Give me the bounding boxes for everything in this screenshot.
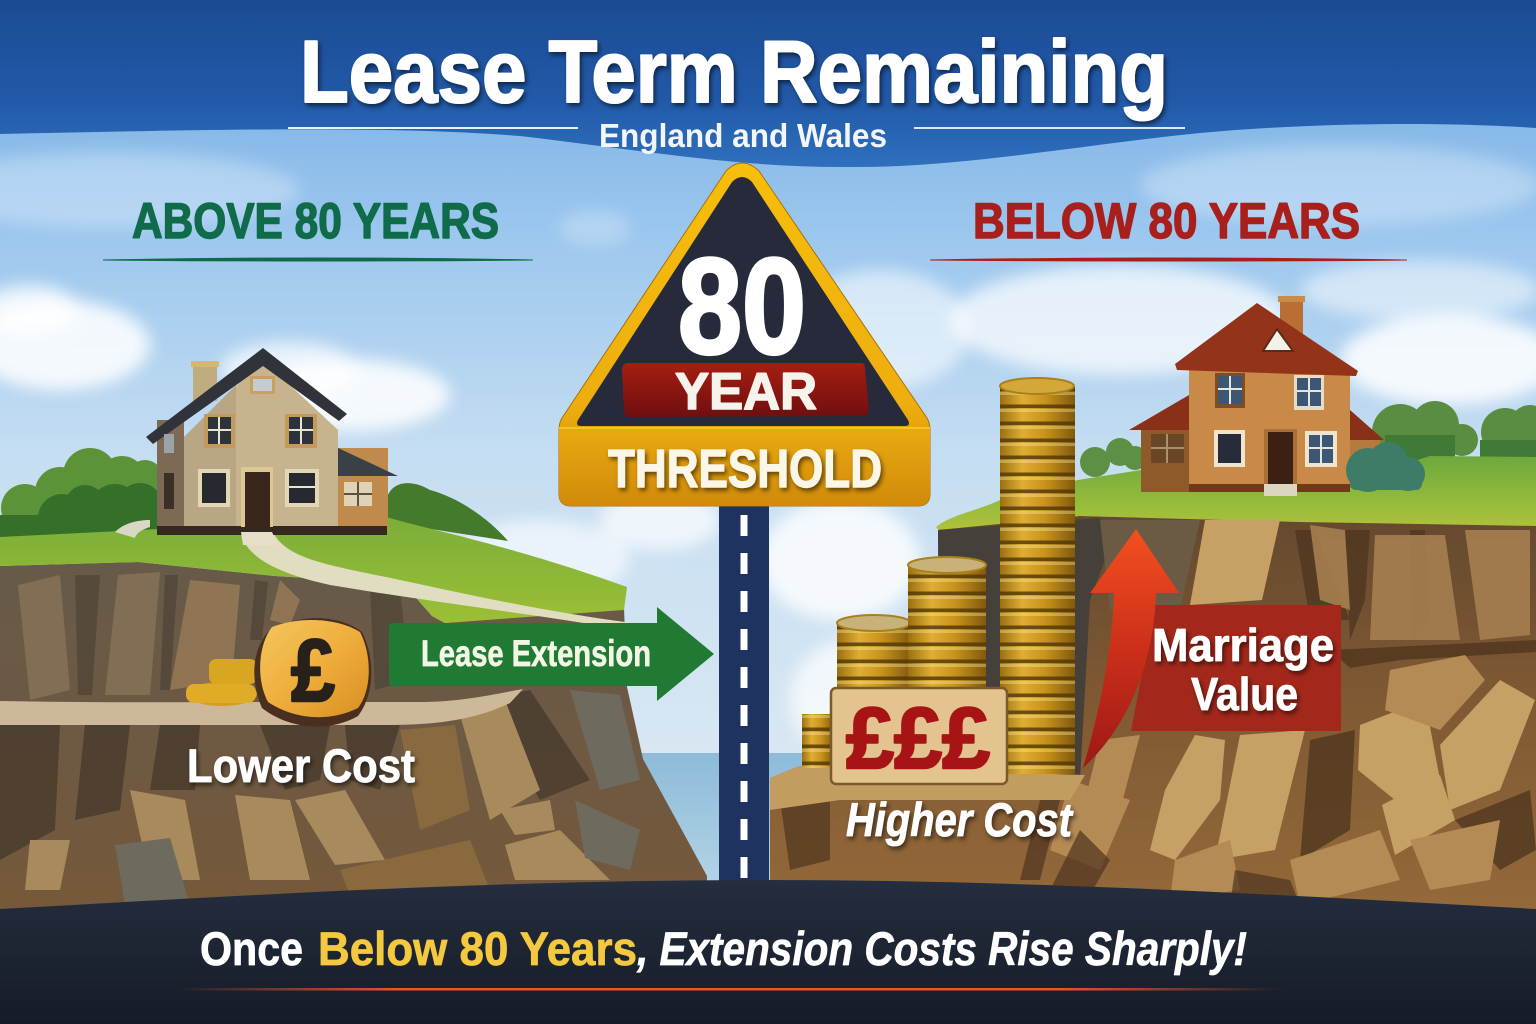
marriage value panel xyxy=(1131,605,1341,731)
label: lower cost: Lower Cost xyxy=(187,739,415,792)
label: threshold: THRESHOLD xyxy=(608,439,882,499)
tall stack xyxy=(1000,378,1075,774)
signpost xyxy=(559,163,930,882)
bottom banner xyxy=(0,880,1536,1024)
title: Lease Term Remaining xyxy=(300,22,1168,121)
heading: below 80 years: BELOW 80 YEARS xyxy=(973,193,1360,249)
right house xyxy=(1129,296,1384,496)
shrub xyxy=(1346,442,1425,492)
arrow: lease extension xyxy=(389,607,714,701)
message: Below 80 Years xyxy=(318,922,637,975)
number 80: 80 xyxy=(678,230,806,382)
subtitle: England and Wales xyxy=(599,117,887,154)
icon: coin stacks xyxy=(802,378,1075,774)
year band xyxy=(622,363,869,421)
tan road band across the cliff xyxy=(0,689,523,725)
pound symbols: £££ xyxy=(846,691,990,787)
wooden pound sign box xyxy=(831,688,1007,787)
post road xyxy=(719,500,769,882)
winding path xyxy=(240,530,650,625)
right cliff with house and coins xyxy=(770,296,1536,910)
right grass xyxy=(936,456,1536,532)
top banner xyxy=(0,0,1536,167)
left cliff rock xyxy=(0,562,707,910)
medium stack xyxy=(908,557,986,689)
right cliff rock xyxy=(770,516,1536,910)
heading: above 80 years: ABOVE 80 YEARS xyxy=(132,193,499,249)
icon: pound coin with small coins xyxy=(186,618,371,726)
right trees xyxy=(1080,401,1536,477)
small stack xyxy=(802,714,834,768)
label: marriage: Marriage xyxy=(1152,619,1334,671)
arrow: rising red xyxy=(1083,529,1179,768)
short stack xyxy=(837,615,911,689)
sea horizon xyxy=(620,753,820,893)
left grass xyxy=(0,517,627,623)
left trees xyxy=(0,448,508,542)
left cliff with house xyxy=(0,348,714,910)
label: higher cost: Higher Cost xyxy=(846,793,1074,846)
pound sign: £ xyxy=(291,621,335,720)
message: , Extension Costs Rise Sharply! xyxy=(636,922,1247,975)
message: Once xyxy=(200,922,303,975)
label: lease extension: Lease Extension xyxy=(421,633,651,674)
left house xyxy=(146,348,398,545)
year band: YEAR xyxy=(675,363,817,421)
label: value: Value xyxy=(1191,668,1298,720)
threshold sign xyxy=(559,163,930,506)
message xyxy=(200,922,1247,975)
